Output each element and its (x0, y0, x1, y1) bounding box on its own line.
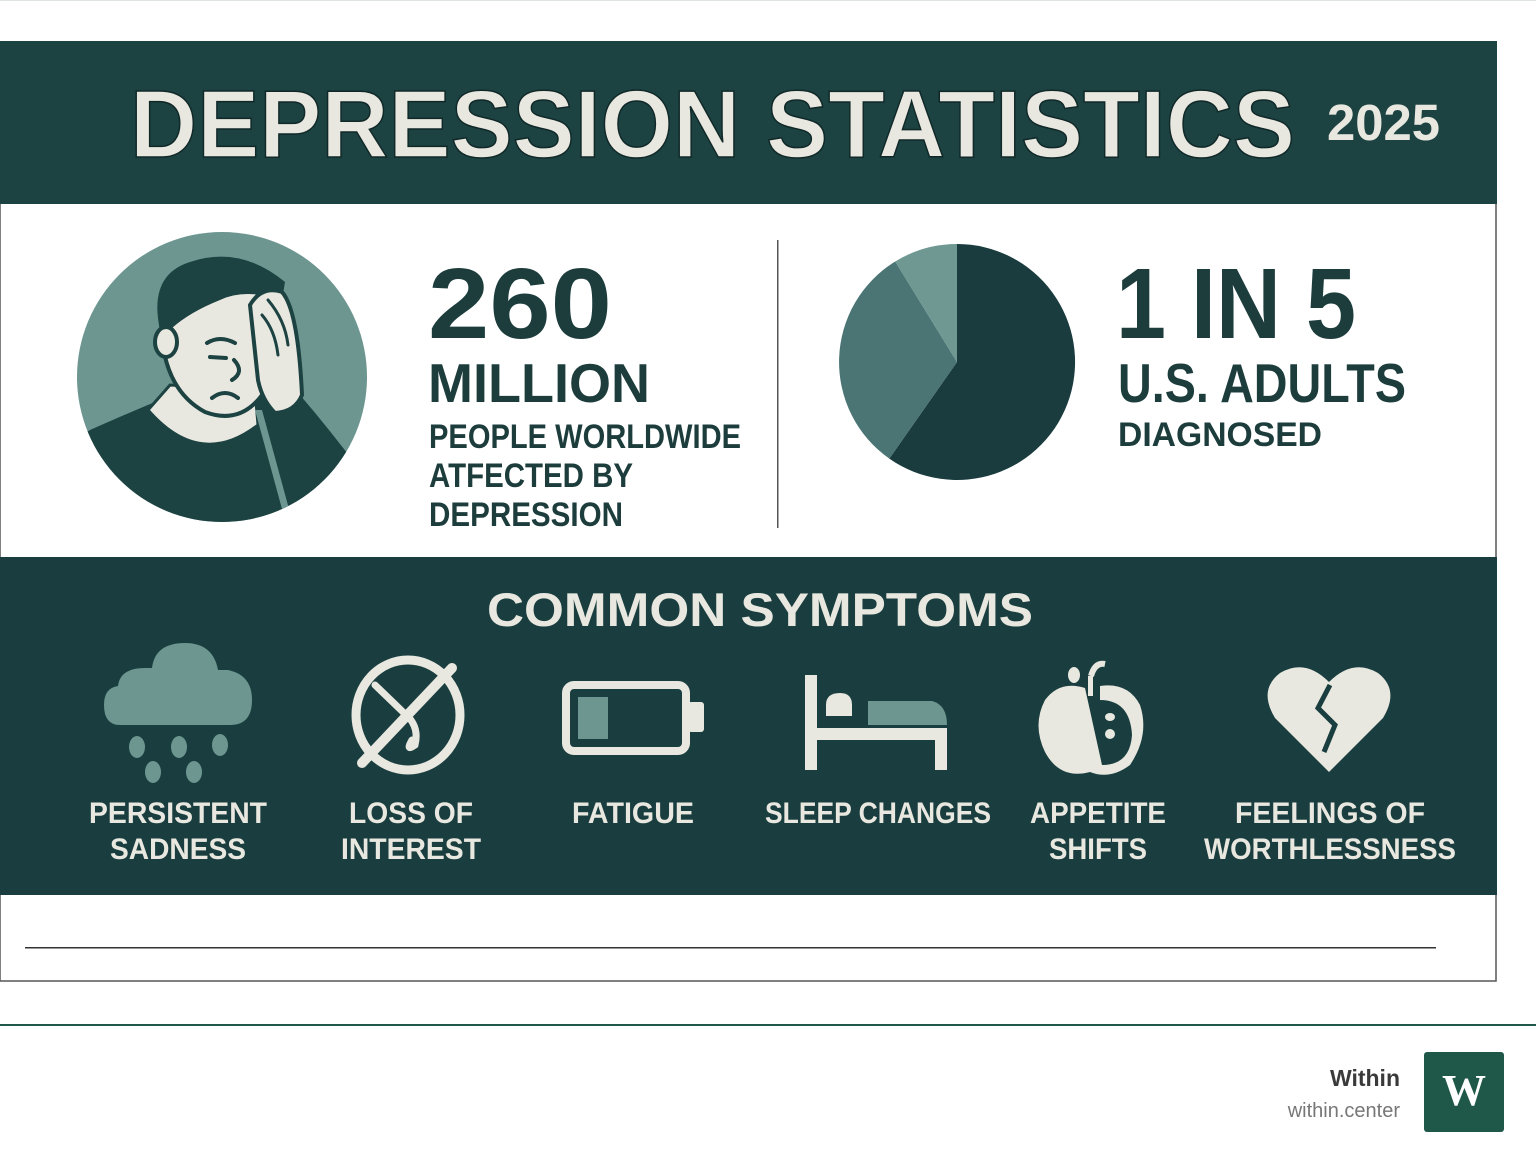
logo: W (1442, 1066, 1486, 1115)
header band (0, 41, 1497, 204)
top faint line (0, 0, 1536, 1)
stat: 1 in 5: DIAGNOSED (1118, 416, 1322, 454)
symptom labels: SLEEP CHANGES (765, 797, 991, 830)
icon: rain cloud (104, 643, 252, 783)
symptom labels: APPETITE (1030, 797, 1166, 830)
symptom labels: SADNESS (110, 833, 246, 866)
symptom labels: FATIGUE (572, 797, 694, 830)
icon: apple (1038, 664, 1143, 775)
symptom labels: LOSS OF (349, 797, 473, 830)
symptom labels: FEELINGS OF (1235, 797, 1425, 830)
icon: battery (566, 685, 704, 751)
symptom labels: SHIFTS (1049, 833, 1147, 866)
divider (777, 240, 778, 528)
icon: broken heart (1268, 667, 1390, 772)
icon: bed (805, 675, 947, 770)
stat: 260 million: DEPRESSION (429, 496, 623, 534)
pie chart (839, 244, 1075, 480)
footer brand text (1287, 1065, 1400, 1122)
stat: 260 million (428, 248, 741, 534)
stat: 1 in 5: 1 IN 5 (1116, 248, 1356, 360)
stat: 1 in 5: U.S. ADULTS (1118, 352, 1406, 414)
symptoms band (0, 557, 1497, 895)
symptoms heading: COMMON SYMPTOMS (487, 583, 1033, 636)
stat: 260 million: MILLION (428, 352, 650, 414)
symptom labels: PERSISTENT (89, 797, 267, 830)
stat: 260 million: ATFECTED BY (429, 457, 633, 495)
card frame (0, 203, 1496, 981)
year: 2025 (1327, 94, 1440, 151)
footer brand text: Within (1330, 1065, 1400, 1091)
logo (1424, 1052, 1504, 1132)
symptom labels: INTEREST (341, 833, 481, 866)
title: DEPRESSION STATISTICS (130, 71, 1295, 178)
bottom rule (25, 947, 1436, 948)
symptom labels: WORTHLESSNESS (1204, 833, 1456, 866)
stat: 260 million: PEOPLE WORLDWIDE (429, 418, 741, 456)
footer green line (0, 1024, 1536, 1026)
stat: 1 in 5 (1116, 248, 1406, 454)
symptom labels (89, 797, 1456, 866)
icon: person with headache (77, 232, 367, 522)
stat: 260 million: 260 (428, 248, 612, 360)
icon: loss of interest (356, 660, 460, 770)
footer brand text: within.center (1287, 1100, 1400, 1122)
